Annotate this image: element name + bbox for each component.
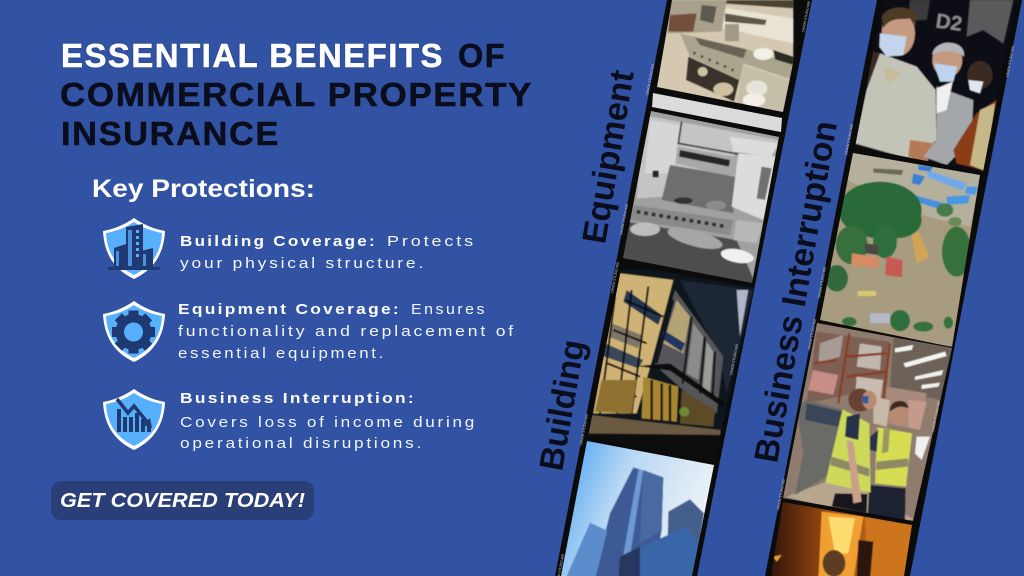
photo: masked workers xyxy=(853,0,1024,177)
button: get covered today xyxy=(51,481,314,520)
film edge labels xyxy=(776,46,1015,511)
title: INSURANCE xyxy=(61,115,280,152)
text: equipment coverage: functionality and replacement of xyxy=(178,323,516,340)
film edge labels: CANON STUDIO 400 xyxy=(807,319,817,351)
text: equipment coverage: essential equipment. xyxy=(178,345,386,362)
icon: building shield xyxy=(103,218,165,279)
photo: lit building at dusk xyxy=(588,270,754,436)
label: equipment: Equipment xyxy=(575,67,642,246)
photo: warehouse workers xyxy=(783,323,952,521)
film edge labels: CANON STUDIO 400 xyxy=(776,479,786,511)
film edge labels: CANON STUDIO 400 xyxy=(1005,46,1015,78)
text: business interruption: operational disruptions. xyxy=(180,435,424,452)
photo: commercial kitchen xyxy=(653,0,793,117)
film edge labels: CANON STUDIO 400 xyxy=(801,1,811,33)
text: building coverage: your physical structure. xyxy=(180,255,426,272)
text: building coverage: Building Coverage: xyxy=(180,233,377,250)
film edge labels: CANON STUDIO 400 xyxy=(844,124,854,156)
film edge labels: CANON STUDIO 400 xyxy=(931,401,941,433)
label: business interruption: Business Interruption xyxy=(747,118,845,465)
text: building coverage xyxy=(180,233,476,272)
text: business interruption: Covers loss of income during xyxy=(180,414,477,431)
film edge labels: CANON STUDIO 400 xyxy=(619,204,629,236)
text: business interruption xyxy=(180,390,477,452)
text: equipment coverage xyxy=(178,301,516,362)
heading: key protections: Key Protections: xyxy=(92,175,315,203)
title: OF xyxy=(458,37,506,74)
photo: flooded district xyxy=(820,153,980,347)
film strip: business interruption xyxy=(765,0,1024,576)
photo: skyscrapers xyxy=(557,437,720,576)
title: COMMERCIAL PROPERTY xyxy=(60,76,533,113)
text: business interruption: Business Interruption: xyxy=(180,390,416,407)
film edge labels: CANON STUDIO 400 xyxy=(610,262,620,294)
icon: gear shield xyxy=(103,301,165,362)
text: equipment coverage: Equipment Coverage: xyxy=(178,301,401,318)
photo: steel kitchen xyxy=(623,111,779,283)
title: ESSENTIAL BENEFITS xyxy=(61,37,444,74)
film edge labels: CANON STUDIO 400 xyxy=(645,64,655,96)
film edge labels: CANON STUDIO 400 xyxy=(729,344,739,376)
label: building: Building xyxy=(532,337,593,473)
button: get covered today: GET COVERED TODAY! xyxy=(60,489,305,512)
photo: masked workers: D2 xyxy=(934,10,964,36)
text: building coverage: Protects xyxy=(387,233,476,250)
text: equipment coverage: Ensures xyxy=(411,301,487,318)
photo: fire xyxy=(771,502,912,576)
band: frame gap xyxy=(652,93,782,132)
film edge labels xyxy=(555,1,811,576)
title xyxy=(60,37,533,152)
icon: falling chart shield xyxy=(103,389,165,450)
film edge labels: CANON STUDIO 400 xyxy=(579,414,589,446)
film edge labels: CANON STUDIO 400 xyxy=(817,267,827,299)
film strip: equipment and building xyxy=(555,0,812,576)
